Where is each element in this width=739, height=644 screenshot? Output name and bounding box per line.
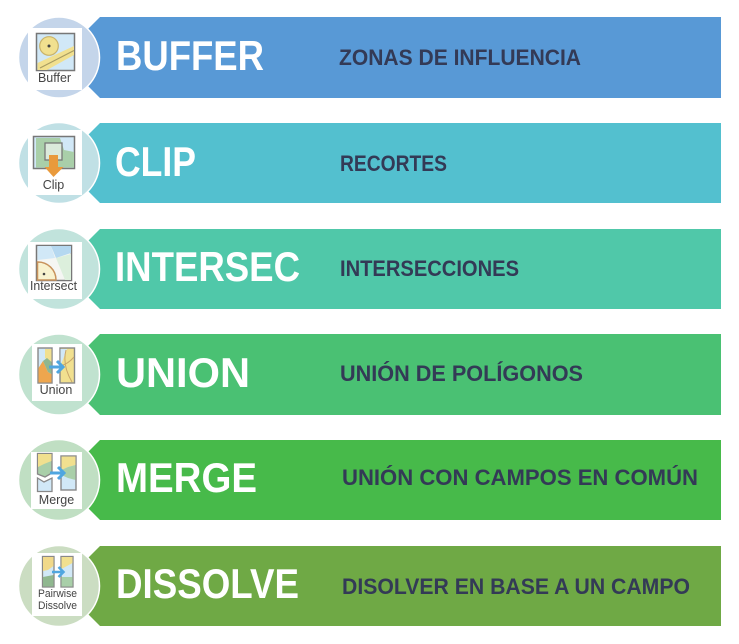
heading: DISSOLVE: DISSOLVE xyxy=(116,560,299,607)
heading: CLIP: CLIP xyxy=(115,138,196,185)
circle: Intersect xyxy=(18,228,100,310)
panel: Intersect row xyxy=(18,228,721,310)
text: ZONAS DE INFLUENCIA: ZONAS DE INFLUENCIA xyxy=(339,45,581,70)
text: UNIÓN CON CAMPOS EN COMÚN: UNIÓN CON CAMPOS EN COMÚN xyxy=(342,465,698,490)
icon: Dissolve tool xyxy=(32,553,82,616)
panel: Dissolve row xyxy=(18,546,721,626)
banner: Intersect xyxy=(88,229,721,309)
icon: Buffer tool xyxy=(28,28,82,90)
icon: Intersect tool xyxy=(28,242,82,299)
icon: Clip tool: Clip xyxy=(43,178,64,192)
text: RECORTES: RECORTES xyxy=(340,151,447,176)
heading: BUFFER: BUFFER xyxy=(116,32,264,79)
icon: Union tool xyxy=(32,344,82,401)
panel: Merge row xyxy=(18,440,721,520)
circle: Clip xyxy=(18,122,100,204)
banner: Clip xyxy=(88,123,721,203)
circle: Union xyxy=(18,334,100,415)
banner: Merge xyxy=(88,440,721,520)
text: DISOLVER EN BASE A UN CAMPO: DISOLVER EN BASE A UN CAMPO xyxy=(342,574,690,599)
icon: Buffer tool: Buffer xyxy=(38,71,71,85)
icon: Clip tool xyxy=(28,130,82,195)
icon: Dissolve tool: Dissolve xyxy=(38,600,77,612)
circle: Dissolve xyxy=(18,546,100,626)
panel: Clip row xyxy=(18,122,721,204)
banner: Union xyxy=(88,334,721,415)
text: UNIÓN DE POLÍGONOS: UNIÓN DE POLÍGONOS xyxy=(340,361,583,386)
banner: Dissolve xyxy=(88,546,721,626)
text: INTERSECCIONES: INTERSECCIONES xyxy=(340,256,519,281)
heading: INTERSEC: INTERSEC xyxy=(115,243,300,290)
icon: Union tool: Union xyxy=(40,383,72,397)
panel: Union row xyxy=(18,334,721,415)
circle: Merge xyxy=(18,440,100,520)
icon: Merge tool: Merge xyxy=(39,493,74,507)
heading: UNION: UNION xyxy=(116,349,250,396)
icon: Dissolve tool: Pairwise xyxy=(38,588,77,600)
banner: Buffer xyxy=(88,17,721,98)
icon: Intersect tool: Intersect xyxy=(30,279,78,293)
heading: MERGE: MERGE xyxy=(116,454,257,501)
panel: Buffer row xyxy=(18,17,721,98)
icon: Merge tool xyxy=(31,452,82,509)
circle: Buffer xyxy=(18,17,100,98)
